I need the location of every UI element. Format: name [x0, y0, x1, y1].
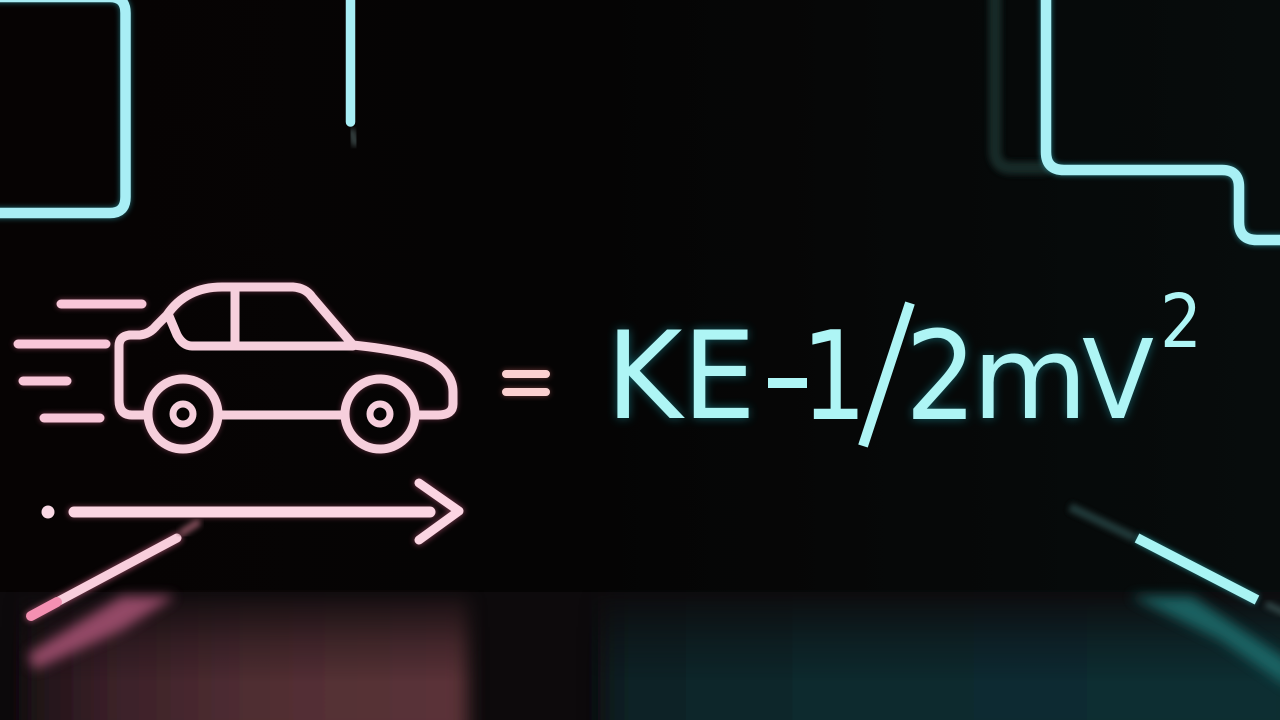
car windows [169, 287, 353, 346]
neon frame: top left [0, 0, 126, 213]
equation: KE = 1/2 mv squared [606, 279, 1202, 449]
equation: 2: 2 [905, 306, 977, 449]
equation: exponent: 2 [1160, 279, 1202, 365]
reflection streak: teal [1130, 596, 1280, 688]
neon line: top right [995, 0, 1280, 240]
equation: KE: KE [606, 306, 756, 447]
car sill [220, 410, 342, 420]
neon line: bottom left [31, 523, 197, 616]
equation: V: V [1082, 316, 1154, 444]
front wheel [345, 379, 415, 449]
equals sign [506, 374, 546, 392]
car body [119, 287, 453, 415]
equation: KE = 1/2 mv squared: KE [606, 306, 756, 447]
equation: 1: 1 [801, 306, 867, 449]
equation: minus [768, 378, 807, 388]
floor [0, 590, 1280, 720]
floor reflection: pink [22, 590, 468, 720]
arrow: direction of motion [42, 483, 459, 540]
equation: KE = 1/2 mv squared: m [972, 312, 1088, 446]
equation: KE = 1/2 mv squared: V [1082, 316, 1154, 444]
reflection streak: pink [28, 596, 176, 670]
equation: m: m [972, 312, 1088, 446]
equation: slash [863, 303, 910, 446]
equation: KE = 1/2 mv squared: 2 [905, 306, 977, 449]
neon line: bottom right [1070, 507, 1280, 613]
rear wheel [148, 379, 218, 449]
floor reflection: teal [598, 604, 1280, 720]
icon: car [119, 287, 453, 449]
neon line: top center [350, 0, 355, 143]
speed lines [18, 304, 142, 418]
